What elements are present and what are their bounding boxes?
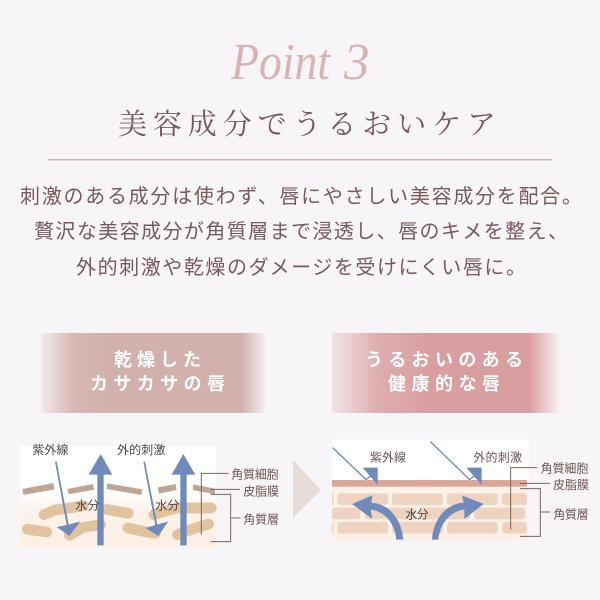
panel: healthy lips label: 健康的な唇 [388,374,500,394]
arrow and water labels [370,449,522,464]
panel: dry lips label: カサカサの唇 [90,374,225,394]
UV and irritant arrows [55,461,168,536]
keratin cell bricks [332,493,527,534]
skin background [332,439,529,481]
layer labels: 皮脂膜 [243,483,279,498]
body text: 外的刺激や乾燥のダメージを受けにくい唇に。 [76,256,526,279]
layer labels [231,467,279,526]
dry keratin cells [27,506,211,535]
layer labels: 皮脂膜 [553,477,589,492]
layer labels: 角質細胞 [231,467,279,482]
panel: dry lips label [41,333,266,413]
sebum film [332,480,527,487]
sebum film fragments [22,483,215,495]
water label: 水分 [405,508,429,522]
arrow and water labels: 水分 [75,499,99,513]
layer brackets [511,468,550,536]
body text: 贅沢な美容成分が角質層まで浸透し、唇のキメを整え、 [34,220,568,243]
panel: healthy lips label [332,333,559,413]
heading: Point 3: Point [230,32,331,91]
body text [20,185,582,279]
water arrows [352,495,484,540]
layer labels: 角質細胞 [541,461,588,476]
deflected arrows [333,442,482,485]
arrow: before to after [293,460,321,518]
arrow and water labels: 水分 [155,499,179,513]
heading: subtitle: 美容成分でうるおいケア [118,108,496,141]
panel: dry lips label: 乾燥した [114,350,201,370]
body text: 刺激のある成分は使わず、唇にやさしい美容成分を配合。 [20,185,582,208]
arrow and water labels: 外的刺激 [117,442,165,457]
layer labels: 角質層 [553,506,589,521]
layer labels: 角質層 [243,511,279,526]
heading rule [48,159,552,160]
panel: healthy lips label: うるおいのある [365,350,523,370]
layer labels [541,461,589,521]
diagram: dry skin [20,442,279,547]
diagram: healthy skin [332,439,589,541]
arrow and water labels: 紫外線 [370,449,406,464]
arrow and water labels: 紫外線 [32,442,68,457]
heading: Point 3: 3 [343,34,369,91]
arrow and water labels: 外的刺激 [473,449,522,464]
arrow and water labels [32,442,179,513]
water arrows [89,454,195,545]
layer brackets [201,473,241,542]
skin background [20,446,216,547]
